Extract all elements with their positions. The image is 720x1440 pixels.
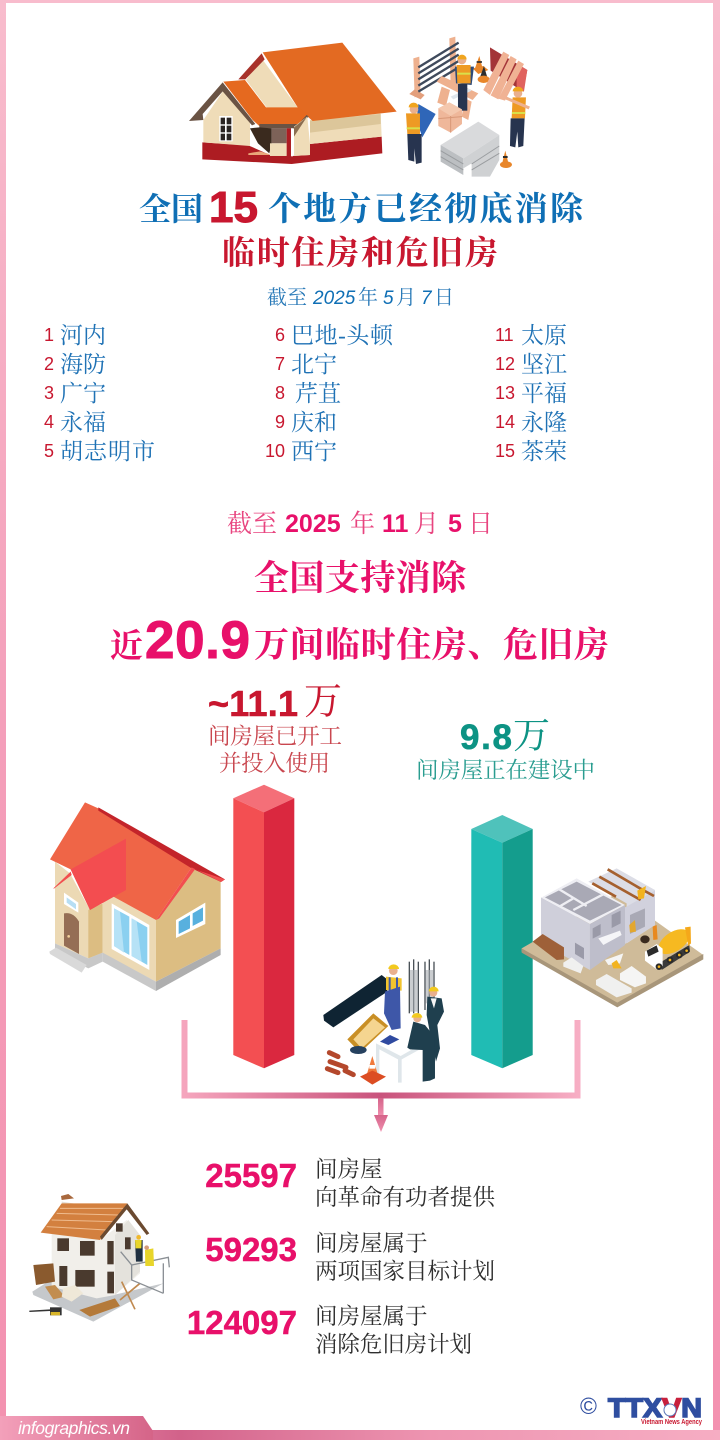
list of 15 localities [44, 323, 567, 464]
headline total: 近 [110, 628, 143, 665]
illustration: old house [189, 43, 397, 164]
column 3: 坚江 [521, 352, 567, 377]
worker right [505, 87, 530, 147]
illustration: two-storey house under construction [29, 1194, 169, 1322]
fence [409, 37, 459, 99]
bricks [327, 1053, 353, 1075]
column 3: 11 [495, 325, 514, 345]
sawhorse and plank [437, 76, 478, 120]
column 1: 海防 [60, 352, 106, 377]
stat: completed homes: 间房屋已开工 [208, 724, 342, 749]
worker centre [455, 55, 474, 111]
date line: 5 November: 日 [468, 511, 493, 538]
date line: 7 May: 截至 [267, 286, 307, 309]
column 1: 4 [44, 412, 54, 432]
column 1 [44, 323, 155, 464]
stat row 3: 124097 [187, 1304, 297, 1341]
stat: completed homes: 万 [304, 681, 342, 723]
date line: 5 November: 年 [350, 510, 375, 538]
title: 15 [209, 183, 258, 232]
stat row 1: 向革命有功者提供 [315, 1185, 495, 1210]
column 1: 3 [44, 383, 54, 403]
column 3 [495, 323, 567, 464]
stat: completed homes [208, 681, 342, 776]
column 1: 1 [44, 325, 54, 345]
stat row 2: 间房屋属于 [315, 1231, 428, 1256]
column 2: 7 [275, 354, 285, 374]
date line: 5 November: 11 [382, 510, 409, 538]
stat: under construction [416, 716, 595, 783]
logo: TTXVN: Vietnam News Agency [641, 1419, 702, 1426]
stat row 2: 59293 [205, 1231, 297, 1268]
logo: TTXVN [580, 1393, 702, 1426]
concrete mixer truck [645, 924, 694, 970]
column 1: 永福 [60, 410, 106, 435]
column 2: 10 [265, 441, 285, 461]
logo: TTXVN: © [580, 1393, 597, 1419]
stat row 3: 间房屋属于 [315, 1304, 428, 1329]
source tab: infographics.vn [18, 1418, 130, 1438]
brick panel [483, 47, 527, 101]
bar: completed [233, 785, 294, 1068]
stat row 2: 两项国家目标计划 [315, 1259, 495, 1284]
date line: 7 May: 5 [383, 288, 394, 309]
stat row 3 [187, 1304, 472, 1357]
headline total [110, 611, 609, 670]
stat: under construction: 万 [513, 716, 550, 757]
column 3: 14 [495, 412, 515, 432]
column 3: 15 [495, 441, 515, 461]
illustration: workers with wheelbarrow [323, 959, 444, 1085]
column 2: 芹苴 [295, 381, 341, 406]
column 3: 太原 [521, 323, 567, 348]
stat row 2 [205, 1231, 495, 1284]
illustration: construction workers and materials [406, 37, 530, 177]
column 1: 5 [44, 441, 54, 461]
headline total: 万间临时住房、危旧房 [254, 626, 609, 665]
title: 临时住房和危旧房 [222, 235, 498, 272]
column 1: 胡志明市 [60, 439, 155, 464]
logo: TTXVN: TTXVN [608, 1393, 702, 1423]
date line: 7 May: 7 [421, 288, 433, 309]
date line: 5 November: 5 [448, 510, 462, 538]
worker with wheelbarrow [384, 964, 402, 1030]
saw [451, 88, 472, 99]
bracket connector [184, 1020, 578, 1096]
stat row 1: 间房屋 [315, 1157, 383, 1182]
date line: 7 May: 月 [396, 287, 416, 309]
date line: 7 May: 日 [434, 287, 454, 309]
title [139, 183, 585, 272]
column 3: 茶荣 [521, 439, 567, 464]
stat row 1: 25597 [205, 1157, 297, 1194]
date line: 5 November: 月 [414, 511, 439, 538]
column 2: 8 [275, 383, 285, 403]
illustration: construction site [522, 868, 703, 1007]
title: 全国 [139, 191, 203, 227]
illustration: finished house [49, 802, 225, 991]
stat: under construction: 间房屋正在建设中 [416, 758, 595, 783]
date line: 5 November: 截至 [227, 510, 277, 538]
column 3: 12 [495, 354, 515, 374]
column 2: 6 [275, 325, 285, 345]
concrete slabs [441, 122, 499, 177]
column 2: 巴地-头顿 [291, 323, 394, 348]
column 2: 北宁 [291, 352, 337, 377]
column 2: 庆和 [291, 410, 337, 435]
heading: national support: 全国支持消除 [254, 559, 469, 598]
column 3: 13 [495, 383, 515, 403]
column 1: 河内 [60, 323, 106, 348]
column 1: 2 [44, 354, 54, 374]
date line: 7 May: 年 [358, 286, 378, 309]
date line: 5 November: 2025 [285, 510, 341, 538]
column 1: 广宁 [60, 381, 106, 406]
stat: completed homes: 并投入使用 [219, 751, 330, 776]
stat row 1 [205, 1157, 495, 1210]
worker left with plan [406, 103, 436, 164]
stat: under construction: 9.8 [460, 718, 512, 757]
stat row 3: 消除危旧房计划 [315, 1332, 472, 1357]
bar: under construction [471, 815, 533, 1068]
column 2: 9 [275, 412, 285, 432]
man standing [427, 987, 444, 1062]
stat: completed homes: ~11.1 [208, 683, 298, 724]
title: 个地方已经彻底消除 [268, 191, 585, 228]
column 2 [265, 323, 394, 464]
man leaning [407, 1013, 435, 1082]
box [438, 102, 462, 133]
breakdown stats [187, 1157, 495, 1357]
cones [473, 56, 512, 168]
column 3: 平福 [521, 381, 567, 406]
headline total: 20.9 [145, 611, 250, 670]
cone [360, 1056, 386, 1085]
date line: 7 May: 2025 [312, 288, 356, 309]
column 2: 西宁 [291, 439, 337, 464]
arrow [374, 1098, 388, 1132]
source tab [0, 1416, 153, 1440]
column 3: 永隆 [521, 410, 567, 435]
